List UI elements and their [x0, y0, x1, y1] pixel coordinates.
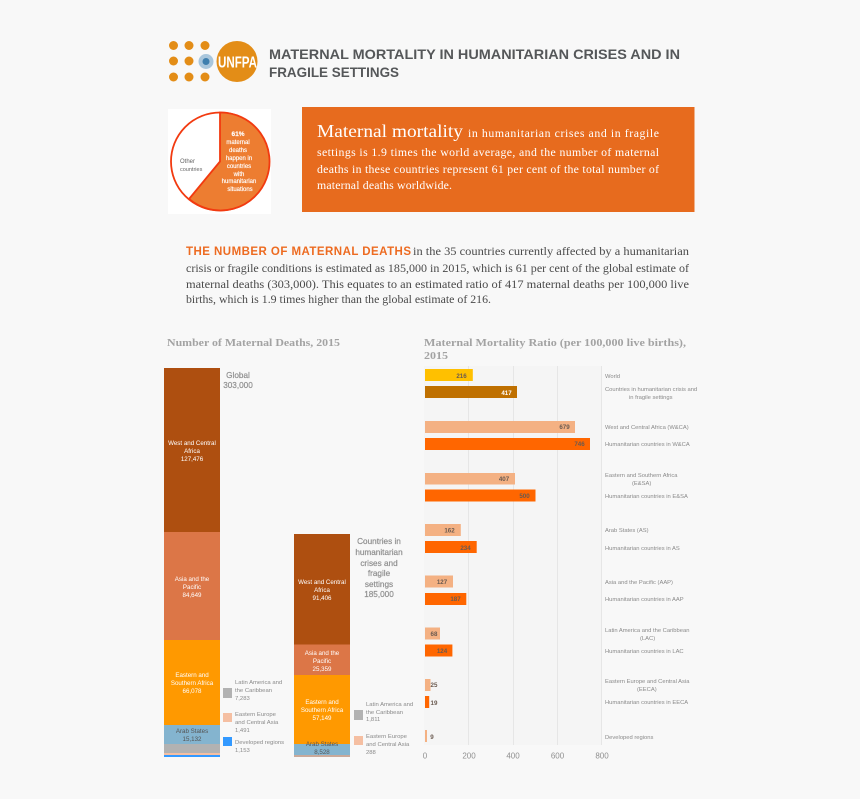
text block: number of maternal deaths: THE NUMBER OF MATERNAL DEATHS [186, 246, 411, 258]
legend: humanitarian small segments [354, 702, 413, 756]
callout: maternal mortality summary: Maternal mortality [317, 121, 463, 141]
label: humanitarian countries total: settings [365, 580, 393, 589]
category labels [605, 374, 697, 741]
heading: maternal mortality ratio chart [424, 337, 686, 362]
stacked bar: humanitarian countries [294, 534, 350, 757]
pie chart: 61 per cent of maternal deaths: happen in [226, 156, 252, 162]
label: humanitarian countries total [355, 537, 403, 599]
title: FRAGILE SETTINGS [269, 64, 399, 80]
callout: maternal mortality summary: deaths in these countries represent 61 per cent of the total number of [317, 162, 659, 176]
category labels: Arab States (AS) [605, 528, 649, 534]
category labels: Humanitarian countries in AAP [605, 597, 684, 603]
stacked bar: global: 127,476 [181, 456, 204, 463]
bar chart: maternal mortality ratio: 25 [431, 682, 438, 689]
stacked bar: global: 15,132 [183, 736, 202, 743]
legend: humanitarian small segments: 1,811 [366, 717, 380, 723]
callout: maternal mortality summary: maternal deaths worldwide. [317, 178, 452, 192]
category labels: Developed regions [605, 735, 653, 741]
stacked bar: humanitarian countries: 8,528 [314, 749, 330, 756]
legend: global small segments: the Caribbean [235, 688, 272, 694]
stacked bar: global: 84,649 [183, 592, 202, 599]
axis labels: 400 [506, 752, 520, 760]
stacked bar: humanitarian countries: 25,359 [313, 666, 332, 673]
stacked bar: humanitarian countries: Southern Africa [301, 707, 344, 714]
stacked bar: global: Africa [184, 448, 200, 455]
bar chart: maternal mortality ratio: 216 [456, 373, 467, 380]
label: global total: 303,000 [223, 381, 253, 390]
bar chart: maternal mortality ratio: 9 [430, 734, 434, 741]
bar chart: maternal mortality ratio: 162 [444, 528, 455, 534]
stacked bar: global [164, 368, 220, 757]
bar chart: maternal mortality ratio: 19 [431, 700, 438, 707]
callout: maternal mortality summary [302, 107, 694, 212]
bar chart: maternal mortality ratio [424, 366, 602, 745]
axis labels: 800 [595, 752, 609, 760]
stacked bar: humanitarian countries: 57,149 [313, 715, 332, 722]
stacked bar: humanitarian countries: West and Central [298, 579, 346, 586]
legend: humanitarian small segments: the Caribbean [366, 710, 403, 716]
stacked bar: global: Pacific [183, 584, 201, 591]
heading: number of maternal deaths chart: Number of Maternal Deaths, 2015 [167, 337, 341, 349]
category labels: Eastern Europe and Central Asia [605, 679, 690, 685]
category labels: Humanitarian countries in AS [605, 546, 680, 552]
pie chart: 61 per cent of maternal deaths: countries [227, 164, 251, 170]
category labels: Countries in humanitarian crisis and [605, 387, 697, 393]
stacked bar: global: 66,078 [183, 688, 202, 695]
stacked bar: global: Eastern and [175, 672, 209, 679]
label: humanitarian countries total: crises and [360, 559, 398, 568]
bar chart: maternal mortality ratio: 234 [460, 545, 471, 552]
label: humanitarian countries total: fragile [368, 569, 391, 578]
legend: global small segments: Developed regions [235, 740, 284, 746]
stacked bar: global: Southern Africa [171, 680, 214, 687]
category labels: Humanitarian countries in W&CA [605, 442, 690, 448]
text block: number of maternal deaths [186, 246, 689, 306]
category labels: Humanitarian countries in E&SA [605, 494, 688, 500]
stacked bar: humanitarian countries: 91,406 [313, 595, 332, 602]
legend: global small segments: 1,153 [235, 748, 250, 754]
category labels: Asia and the Pacific (AAP) [605, 580, 673, 586]
label: global total [223, 371, 253, 390]
callout: maternal mortality summary: in humanitarian crises and in fragile [468, 126, 659, 140]
stacked bar: global: Arab States [176, 728, 208, 735]
stacked bar: humanitarian countries: Pacific [313, 658, 331, 665]
label: humanitarian countries total: 185,000 [364, 590, 394, 599]
bar chart: maternal mortality ratio: 127 [437, 579, 448, 586]
heading: maternal mortality ratio chart: Maternal Mortality Ratio (per 100,000 live births), [424, 337, 686, 349]
callout: maternal mortality summary: settings is 1.9 times the world average, and the number of maternal [317, 145, 660, 159]
pie chart: 61 per cent of maternal deaths: 61% [231, 131, 245, 138]
stacked bar: humanitarian countries: Arab States [306, 741, 338, 748]
legend: global small segments [223, 680, 284, 754]
legend: global small segments: and Central Asia [235, 720, 279, 726]
heading: maternal mortality ratio chart: 2015 [424, 350, 449, 362]
legend: humanitarian small segments: 288 [366, 750, 377, 756]
icon: UNFPA logo: UNFPA [218, 54, 257, 72]
pie chart: 61 per cent of maternal deaths: deaths [229, 148, 247, 154]
stacked bar: global: Asia and the [175, 576, 210, 583]
axis labels: 600 [551, 752, 565, 760]
category labels: (E&SA) [632, 481, 651, 487]
title [269, 46, 680, 80]
stacked bar: humanitarian countries: Asia and the [305, 650, 340, 657]
category labels: in fragile settings [629, 395, 673, 401]
category labels: Latin America and the Caribbean [605, 628, 689, 634]
category labels: Humanitarian countries in EECA [605, 700, 688, 706]
legend: global small segments: Latin America and [235, 680, 282, 686]
pie chart: 61 per cent of maternal deaths: maternal [226, 140, 250, 146]
bar chart: maternal mortality ratio: 746 [574, 441, 585, 448]
pie chart: 61 per cent of maternal deaths: countries [180, 167, 203, 173]
category labels: Humanitarian countries in LAC [605, 649, 684, 655]
label: humanitarian countries total: humanitarian [355, 548, 403, 557]
stacked bar: humanitarian countries: Africa [314, 587, 330, 594]
axis labels [423, 752, 609, 760]
axis labels: 200 [462, 752, 476, 760]
axis labels: 0 [423, 752, 428, 760]
label: global total: Global [226, 371, 250, 380]
category labels: Eastern and Southern Africa [605, 473, 678, 479]
category labels: (EECA) [637, 687, 657, 693]
bar chart: maternal mortality ratio: 187 [450, 596, 461, 603]
legend: humanitarian small segments: Eastern Europe [366, 734, 408, 740]
legend: global small segments: Eastern Europe [235, 712, 277, 718]
bar chart: maternal mortality ratio: 679 [559, 424, 570, 431]
label: humanitarian countries total: Countries in [357, 537, 401, 546]
bar chart: maternal mortality ratio: 124 [437, 648, 448, 655]
title: MATERNAL MORTALITY IN HUMANITARIAN CRISES AND IN [269, 46, 680, 62]
bar chart: maternal mortality ratio: 417 [501, 390, 512, 397]
bar chart: maternal mortality ratio: 407 [499, 476, 510, 483]
pie chart: 61 per cent of maternal deaths: situations [227, 187, 253, 193]
pie chart: 61 per cent of maternal deaths [168, 109, 271, 214]
stacked bar: global: West and Central [168, 440, 216, 447]
pie chart: 61 per cent of maternal deaths: humanitarian [222, 179, 256, 185]
text block: number of maternal deaths: in the 35 countries currently affected by a humanitarian [413, 246, 689, 258]
stacked bar: humanitarian countries: Eastern and [305, 699, 339, 706]
text block: number of maternal deaths: births, which is 1.9 times higher than the global estimate of 216. [186, 294, 491, 306]
bar chart: maternal mortality ratio: 68 [431, 631, 438, 638]
legend: global small segments: 7,283 [235, 696, 250, 702]
text block: number of maternal deaths: crisis or fragile conditions is estimated as 185,000 in 2015, which is 61 per cent of the global estimate of [186, 263, 689, 275]
pie chart: 61 per cent of maternal deaths: with [233, 172, 244, 178]
icon: UNFPA logo [169, 41, 258, 82]
text block: number of maternal deaths: maternal deaths (303,000). This equates to an estimated ratio of 417 maternal deaths per 100,000 live [186, 279, 689, 291]
category labels: West and Central Africa (W&CA) [605, 425, 689, 431]
category labels: World [605, 374, 620, 380]
pie chart: 61 per cent of maternal deaths: Other [180, 159, 195, 165]
category labels: (LAC) [640, 636, 655, 642]
legend: humanitarian small segments: Latin America and [366, 702, 413, 708]
bar chart: maternal mortality ratio: 500 [519, 493, 530, 500]
legend: humanitarian small segments: and Central Asia [366, 742, 410, 748]
legend: global small segments: 1,491 [235, 728, 250, 734]
